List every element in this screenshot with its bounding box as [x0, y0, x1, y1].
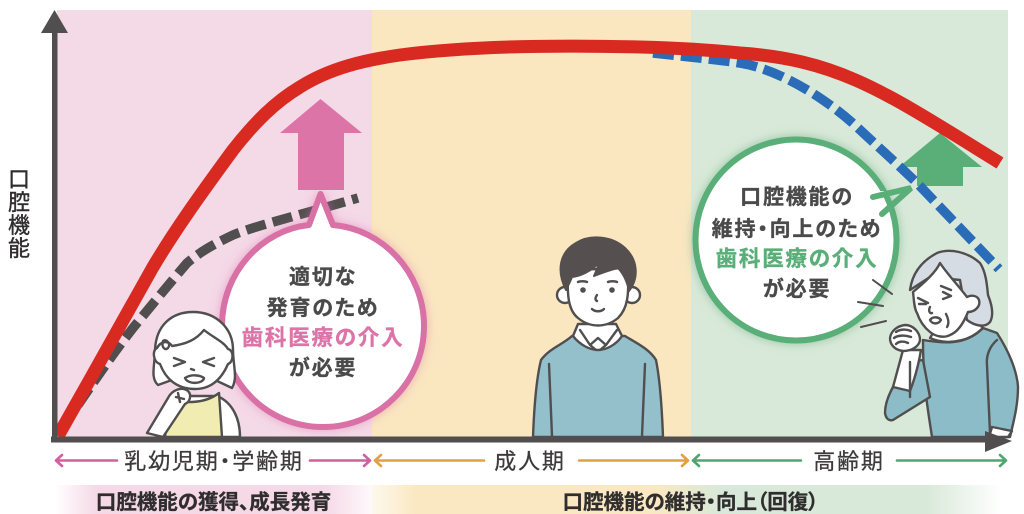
horizontal axis arrow — [51, 431, 1012, 452]
curve: gray dashed decline in child development — [78, 198, 358, 405]
text: pink bubble message: 歯科医療の介入 — [242, 326, 404, 350]
text: green bubble message: 歯科医療の介入 — [716, 247, 878, 271]
text: green bubble message: 口腔機能の — [740, 186, 854, 209]
text: green bubble message — [712, 186, 882, 301]
y axis label — [8, 167, 30, 261]
curve: blue dashed decline in old age — [653, 53, 999, 269]
stage: old age span: 高齢期 — [813, 449, 885, 474]
y axis label: 口 — [8, 167, 30, 192]
curve: red ideal oral function — [58, 46, 1000, 436]
stage: adulthood span — [375, 449, 688, 474]
text: green bubble message: 維持・向上のため — [712, 218, 882, 241]
illustration: child with toothache — [147, 312, 240, 437]
stage: adulthood span: 成人期 — [494, 449, 566, 474]
stage: infancy and school age span — [56, 449, 370, 474]
panel: adulthood — [372, 10, 691, 437]
stage: infancy and school age span: 乳幼児期・学齢期 — [124, 449, 304, 474]
vertical axis arrow — [41, 10, 68, 442]
text: pink bubble message: が必要 — [289, 356, 357, 380]
text: green bubble message: が必要 — [763, 277, 831, 301]
y axis label: 腔 — [8, 190, 30, 215]
text: pink bubble message: 適切な — [289, 266, 357, 289]
band: acquisition and growth — [55, 485, 372, 514]
y axis label: 機 — [8, 213, 30, 238]
band: maintenance and improvement — [372, 485, 1002, 514]
band: maintenance and improvement: 口腔機能の維持・向上（回復） — [563, 491, 818, 514]
illustration: adult in blue sweater — [533, 237, 663, 437]
arrow: green improvement arrow — [899, 133, 982, 186]
illustration: elderly person coughing — [858, 251, 1018, 437]
text: pink bubble message — [242, 266, 404, 380]
panel: infancy and school age — [57, 10, 372, 437]
panel: old age — [691, 10, 1008, 437]
stage: old age span — [693, 449, 1006, 474]
callout: pink speech bubble — [222, 194, 424, 427]
arrow: pink improvement arrow — [280, 99, 362, 190]
text: pink bubble message: 発育のため — [267, 297, 379, 320]
band: acquisition and growth: 口腔機能の獲得、成長発育 — [96, 490, 331, 514]
y axis label: 能 — [8, 236, 30, 261]
callout: green speech bubble — [696, 140, 911, 340]
